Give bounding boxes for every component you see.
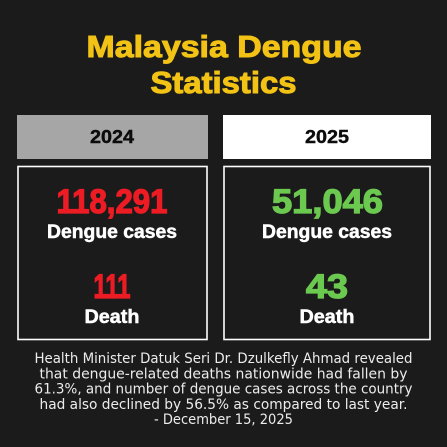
- title: Malaysia Dengue: [86, 29, 362, 64]
- text block: summary: 61.3%, and number of dengue cases across the country: [34, 382, 412, 398]
- 2024 death label: Death: [84, 307, 140, 328]
- 2025 death label: Death: [300, 307, 354, 328]
- panel: 2025 statistics: [224, 166, 430, 340]
- panel: 2024 year header: [17, 115, 208, 159]
- 2024 death number: 111: [94, 268, 130, 306]
- title: [86, 29, 362, 100]
- panel: 2025 year header: 2025: [305, 127, 349, 147]
- 2025 death number: 43: [306, 268, 348, 306]
- panel: 2024 year header: 2024: [90, 127, 134, 147]
- panel: 2024 statistics: [18, 166, 207, 340]
- text block: summary: had also declined by 56.5% as compared to last year.: [40, 397, 408, 413]
- 2025 dengue cases label: Dengue cases: [262, 222, 392, 243]
- 2024 dengue cases label: Dengue cases: [47, 222, 177, 243]
- text block: summary: [34, 351, 412, 428]
- text block: summary: that dengue-related deaths nationwide had fallen by: [40, 366, 408, 382]
- title: Statistics: [150, 65, 296, 100]
- text block: summary: - December 15, 2025: [154, 412, 293, 428]
- 2024 dengue cases number: 118,291: [56, 183, 168, 221]
- text block: summary: Health Minister Datuk Seri Dr. Dzulkefly Ahmad revealed: [34, 351, 412, 367]
- panel: 2025 year header: [223, 115, 431, 159]
- 2025 dengue cases number: 51,046: [272, 183, 383, 221]
